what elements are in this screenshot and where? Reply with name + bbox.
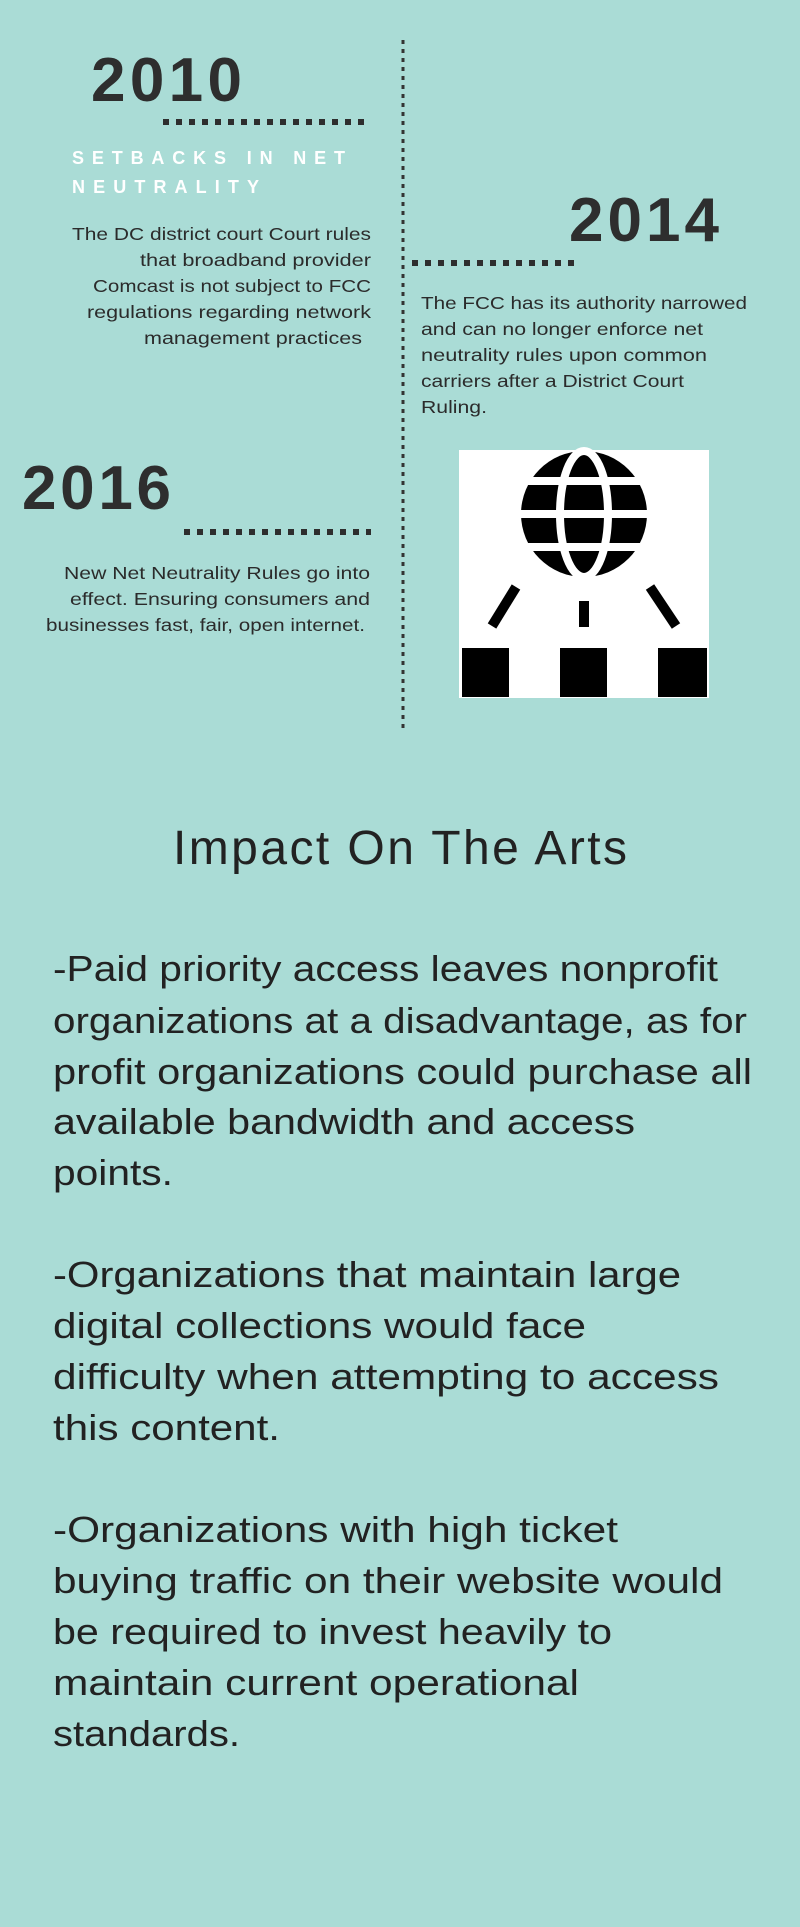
year 2016: 2016 <box>22 454 171 523</box>
year 2010: 2010 <box>91 46 242 115</box>
text: impact point 3: maintain current operational <box>53 1662 579 1703</box>
text: impact point 3: buying traffic on their website would <box>53 1560 723 1601</box>
subheading: setbacks: NEUTRALITY <box>72 177 259 197</box>
text: impact point 2: digital collections would face <box>53 1305 586 1346</box>
text: 2014 description: Ruling. <box>421 397 487 417</box>
heading: impact on the arts: Impact On The Arts <box>173 822 627 875</box>
text: 2014 description: neutrality rules upon common <box>421 345 707 365</box>
text: 2010 description: The DC district court Court rules <box>72 224 371 244</box>
text: 2010 description: regulations regarding network <box>87 302 371 322</box>
text: 2014 description: The FCC has its authority narrowed <box>421 293 747 313</box>
year 2014: 2014 <box>569 186 720 255</box>
text: 2010 description <box>72 224 371 348</box>
text: 2014 description: and can no longer enforce net <box>421 319 703 339</box>
text: impact point 2 <box>53 1254 719 1448</box>
text: impact point 1 <box>53 948 752 1193</box>
text: impact point 3 <box>53 1509 723 1754</box>
text: impact point 1: points. <box>53 1152 173 1193</box>
icon: network globe <box>459 450 709 698</box>
text: impact point 3: standards. <box>53 1713 240 1754</box>
text: 2014 description: carriers after a District Court <box>421 371 684 391</box>
subheading: setbacks <box>72 148 345 197</box>
text: impact point 2: this content. <box>53 1407 280 1448</box>
text: 2010 description: management practices <box>144 328 362 348</box>
text: 2010 description: Comcast is not subject to FCC <box>93 276 371 296</box>
text: 2010 description: that broadband provider <box>140 250 371 270</box>
text: impact point 1: -Paid priority access leaves nonprofit <box>53 948 718 989</box>
text: impact point 2: -Organizations that maintain large <box>53 1254 681 1295</box>
text: impact point 3: be required to invest heavily to <box>53 1611 612 1652</box>
text: 2016 description: businesses fast, fair, open internet. <box>46 615 365 635</box>
text: 2016 description: New Net Neutrality Rules go into <box>64 563 370 583</box>
text: 2014 description <box>421 293 747 417</box>
text: impact point 3: -Organizations with high ticket <box>53 1509 618 1550</box>
text: 2016 description: effect. Ensuring consumers and <box>70 589 370 609</box>
text: 2016 description <box>46 563 370 635</box>
text: impact point 1: available bandwidth and access <box>53 1101 635 1142</box>
text: impact point 2: difficulty when attempting to access <box>53 1356 719 1397</box>
text: impact point 1: organizations at a disadvantage, as for <box>53 1000 747 1041</box>
subheading: setbacks: SETBACKS IN NET <box>72 148 345 168</box>
text: impact point 1: profit organizations could purchase all <box>53 1051 752 1092</box>
